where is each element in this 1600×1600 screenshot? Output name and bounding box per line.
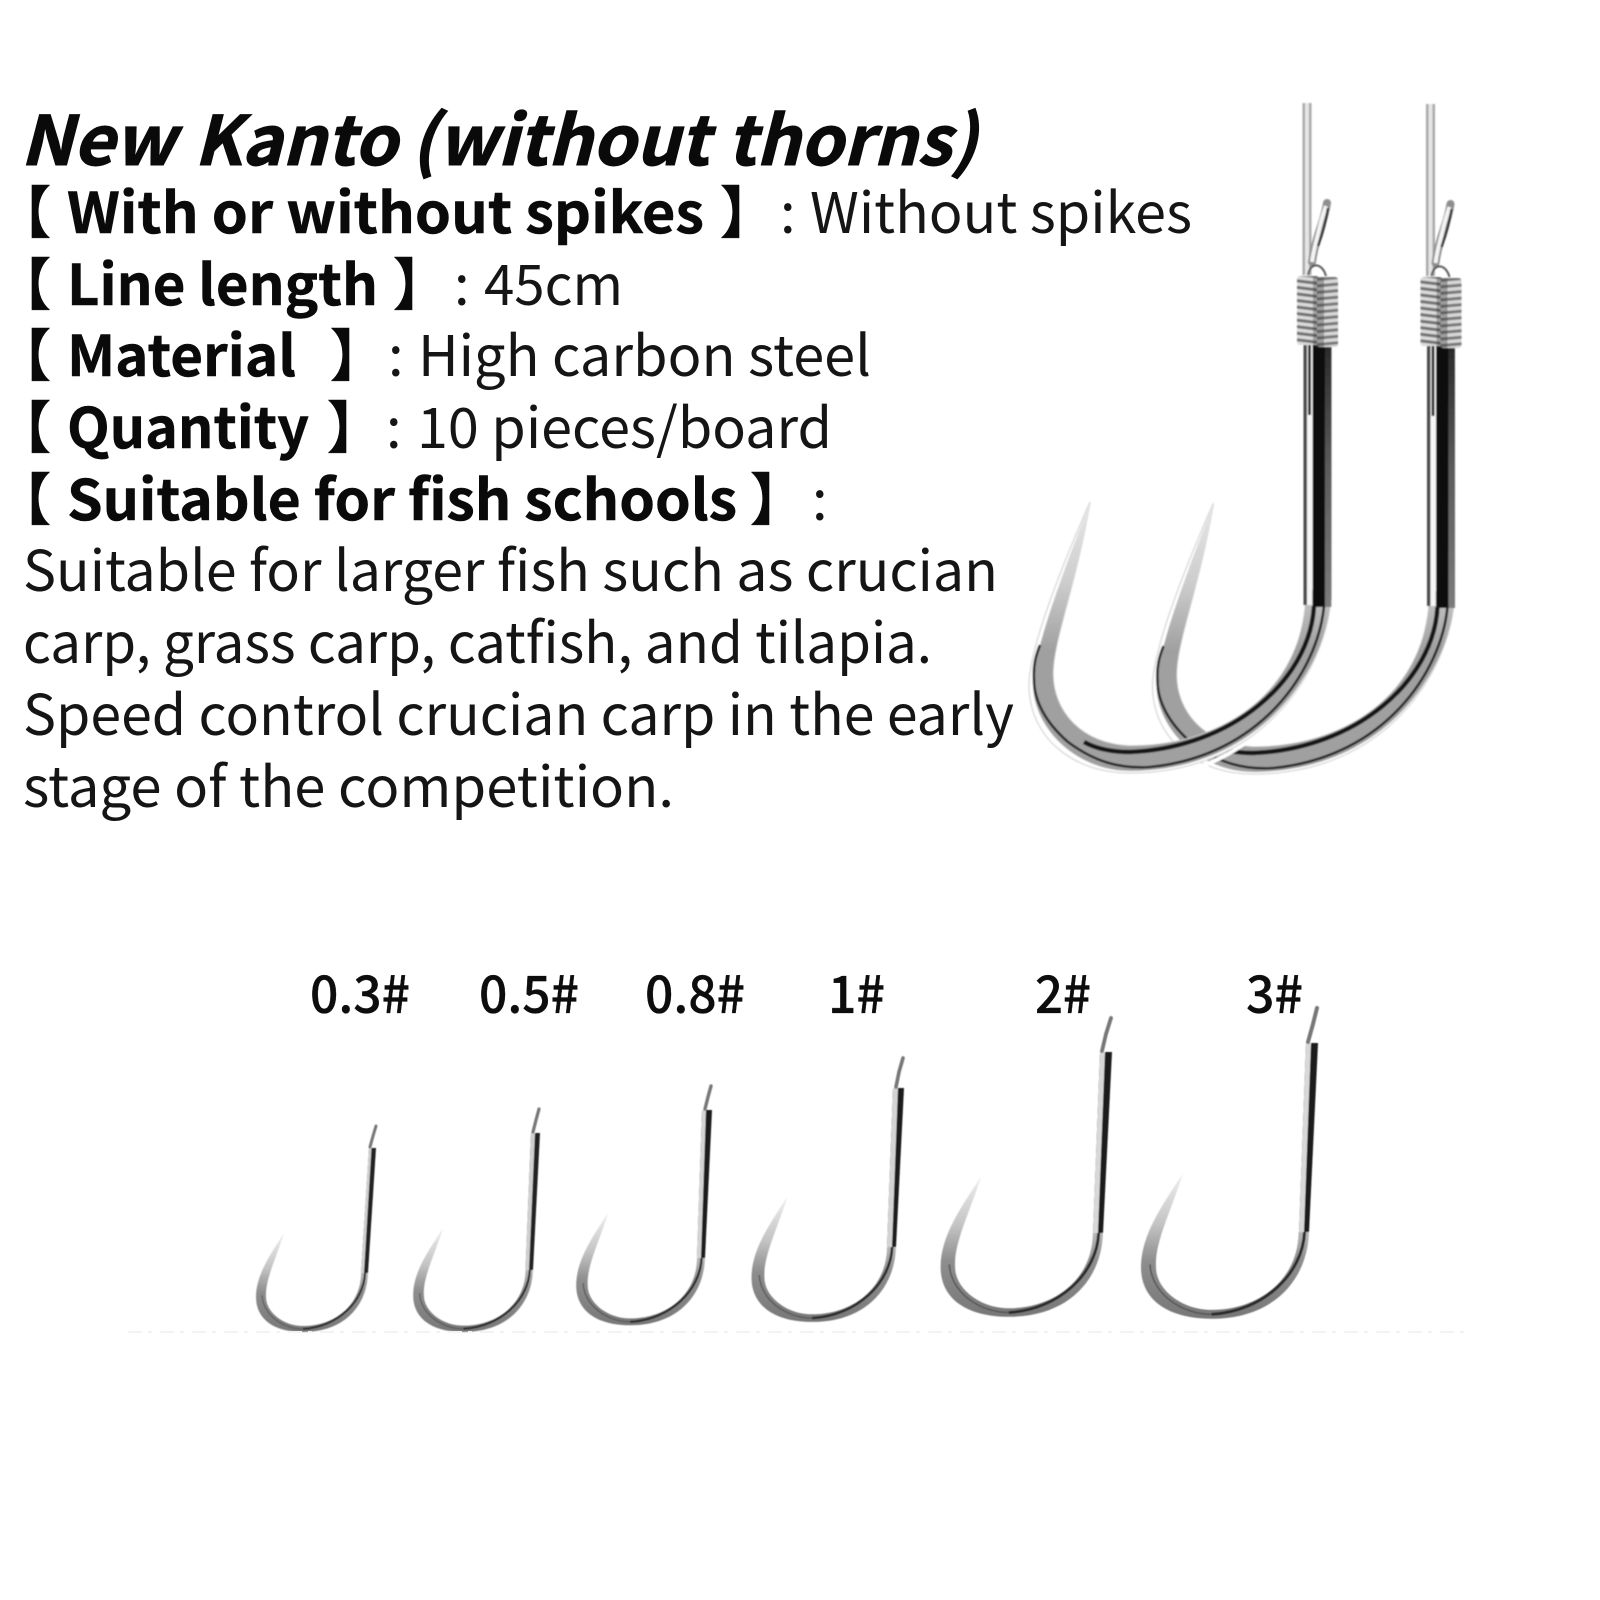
spec: material — [0, 312, 871, 393]
spec: quantity: 10 pieces/board — [417, 384, 832, 465]
hook: size 0.5# — [413, 1109, 540, 1332]
spec: material: 】 — [330, 312, 386, 393]
size label: 0.8#: 0.8# — [645, 953, 745, 1028]
title: (without — [411, 86, 717, 185]
title: thorns) — [727, 86, 980, 185]
hook: size 0.8# — [576, 1086, 712, 1325]
title — [20, 86, 980, 185]
spec: with or without spikes: With or without spikes — [67, 169, 704, 250]
spec: quantity: 】 — [327, 384, 383, 465]
spec: with or without spikes: 】 — [720, 169, 776, 250]
title: New — [20, 86, 184, 185]
size label: 2#: 2# — [1035, 953, 1091, 1028]
spec: line length: 】 — [393, 241, 449, 322]
title: Kanto — [194, 86, 402, 185]
size label: 3#: 3# — [1246, 953, 1303, 1028]
spec: material: High carbon steel — [418, 312, 871, 393]
description paragraph: Speed control crucian carp in the early — [23, 671, 1014, 752]
spec: material: Material — [67, 312, 296, 393]
spec: quantity: : — [386, 384, 402, 465]
description paragraph: stage of the competition. — [23, 743, 674, 824]
spec: line length: Line length — [67, 241, 378, 322]
spec: with or without spikes — [0, 169, 1192, 250]
spec: suitable for fish schools: 】 — [750, 456, 806, 537]
spec: line length: 45cm — [484, 241, 623, 322]
spec: suitable for fish schools: Suitable for fish schools — [67, 456, 737, 537]
spec: quantity: Quantity — [67, 384, 309, 465]
hook: size 2# — [941, 1018, 1112, 1317]
description paragraph: carp, grass carp, catfish, and tilapia. — [23, 599, 932, 680]
spec: quantity — [0, 384, 832, 465]
description paragraph: Suitable for larger fish such as crucian — [23, 527, 998, 608]
spec: with or without spikes: Without spikes — [810, 169, 1192, 250]
spec: with or without spikes: : — [780, 169, 796, 250]
description paragraph — [23, 527, 1014, 824]
large product photo: two snelled hooks — [1029, 103, 1462, 775]
spec: suitable for fish schools: : — [812, 456, 828, 537]
hook: size 0.3# — [256, 1126, 376, 1332]
size label: 1#: 1# — [828, 953, 885, 1028]
size label: 0.3#: 0.3# — [310, 953, 410, 1028]
spec: line length — [0, 241, 623, 322]
hook: size 3# — [1141, 1008, 1318, 1319]
hook: size 1# — [752, 1058, 904, 1322]
size label: 0.5#: 0.5# — [479, 953, 579, 1028]
spec: line length: : — [454, 241, 470, 322]
spec: material: : — [388, 312, 404, 393]
